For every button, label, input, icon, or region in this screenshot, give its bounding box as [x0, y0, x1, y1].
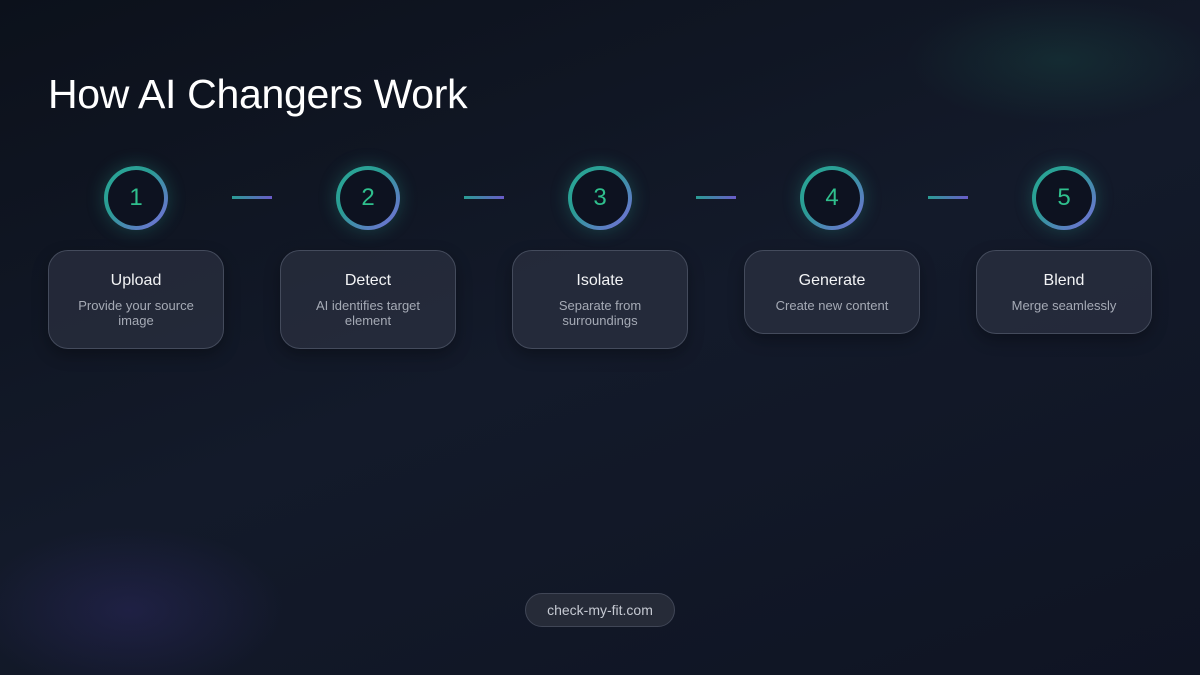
card: Isolate: surroundings — [562, 313, 638, 328]
card: Generate — [744, 250, 920, 334]
step 2 circle: 2 — [361, 184, 375, 211]
connector arrow 3-4 — [696, 196, 736, 199]
card: Isolate: Isolate — [576, 272, 624, 289]
step 3 circle — [568, 166, 632, 230]
card: Upload: Provide your source — [78, 298, 194, 313]
step 1 circle — [104, 166, 168, 230]
card: Upload: image — [118, 313, 154, 328]
title: How AI Changers Work — [48, 71, 467, 117]
card: Blend: Blend — [1044, 272, 1084, 289]
step 5 circle: 5 — [1057, 184, 1071, 211]
step 2 circle — [336, 166, 400, 230]
connector arrow 2-3 — [464, 196, 504, 199]
card: Detect: AI identifies target — [316, 298, 420, 313]
step 1 circle: 1 — [129, 184, 143, 211]
step 3 circle: 3 — [593, 184, 607, 211]
footer url badge — [525, 593, 675, 627]
connector arrow 1-2 — [232, 196, 272, 199]
step 4 circle — [800, 166, 864, 230]
card: Detect — [280, 250, 456, 349]
card: Upload — [48, 250, 224, 349]
footer url badge: check-my-fit.com — [547, 602, 653, 618]
card: Isolate: Separate from — [559, 298, 641, 313]
card: Isolate — [512, 250, 688, 349]
card: Generate: Create new content — [776, 298, 888, 313]
card: Generate: Generate — [799, 272, 865, 289]
step 5 circle — [1032, 166, 1096, 230]
connector arrow 4-5 — [928, 196, 968, 199]
card: Detect: element — [345, 313, 391, 328]
card: Detect: Detect — [345, 272, 391, 289]
card: Upload: Upload — [111, 272, 161, 289]
card: Blend: Merge seamlessly — [1012, 298, 1116, 313]
step 4 circle: 4 — [825, 184, 839, 211]
card: Blend — [976, 250, 1152, 334]
